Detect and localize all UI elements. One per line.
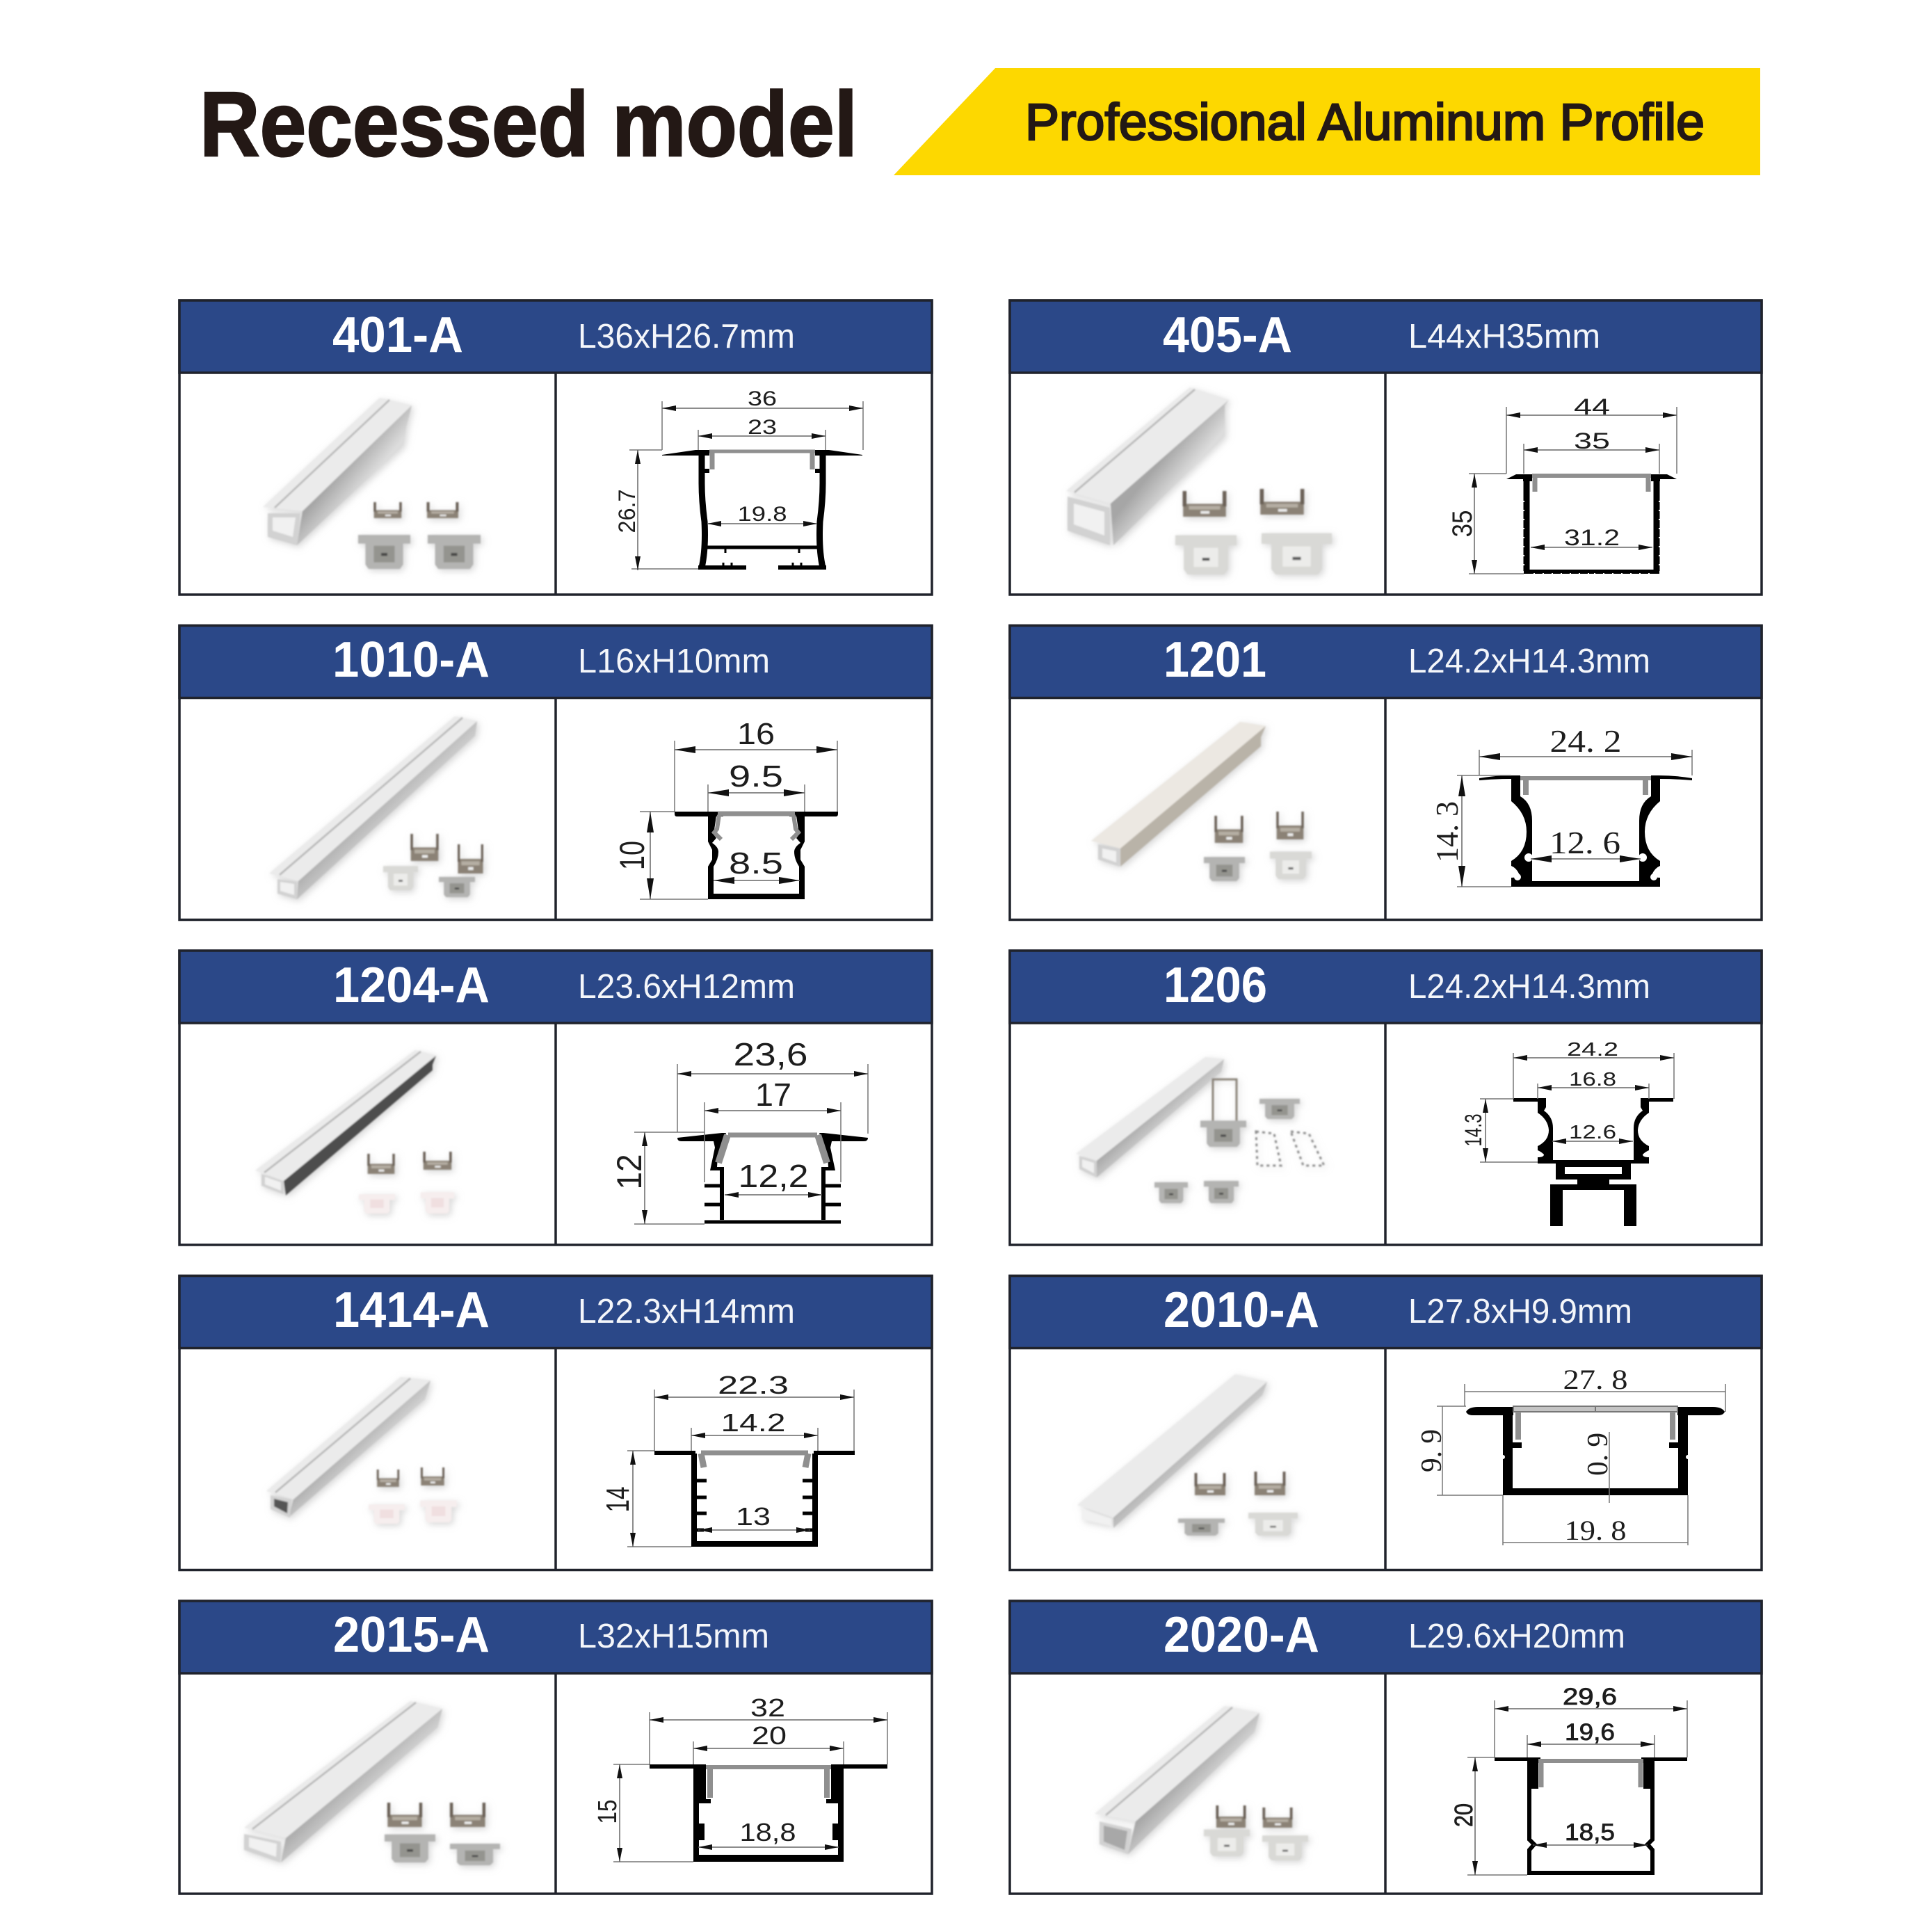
cross-section drawing: 17 [755, 1077, 791, 1113]
model name: 2010-A [1164, 1282, 1319, 1338]
model name: 1010-A [332, 632, 490, 688]
size spec: L44xH35mm [1408, 318, 1600, 355]
product photo: rail and clips [244, 1701, 500, 1865]
size spec: L24.2xH14.3mm [1408, 968, 1650, 1006]
cross-section drawing: 44 [1574, 394, 1610, 419]
product photo: rail and clips [1095, 1706, 1308, 1860]
cross-section drawing: 24. 2 [1549, 723, 1622, 759]
panel: 1010-A [179, 626, 932, 919]
product photo: rail and clips [269, 716, 483, 899]
cross-section drawing: 19,6 [1565, 1719, 1615, 1746]
cross-section drawing: 23,6 [733, 1036, 808, 1072]
cross-section drawing: 31.2 [1564, 525, 1620, 550]
size spec: L24.2xH14.3mm [1408, 643, 1650, 680]
cross-section drawing: 26.7 [614, 490, 641, 533]
cross-section drawing: 14 [599, 1487, 636, 1512]
cross-section drawing: 22.3 [718, 1371, 789, 1399]
cross-section drawing: 12.6 [1569, 1121, 1616, 1143]
cross-section drawing: 29,6 [1563, 1684, 1617, 1710]
cross-section drawing: 16.8 [1569, 1068, 1616, 1090]
cross-section drawing: 20 [1449, 1803, 1478, 1827]
cross-section drawing: 18,5 [1565, 1819, 1615, 1846]
cross-section drawing: 35 [1574, 428, 1610, 453]
size spec: L22.3xH14mm [578, 1293, 795, 1330]
cross-section drawing: 14.2 [721, 1408, 786, 1437]
cross-section drawing: 14. 3 [1429, 801, 1465, 862]
title: Recessed model [200, 73, 858, 175]
cross-section drawing: 24.2 [1567, 1038, 1618, 1060]
yellow banner: Professional Aluminum Profile [1025, 93, 1705, 151]
size spec: L16xH10mm [578, 643, 770, 680]
cross-section drawing: 0. 9 [1582, 1433, 1614, 1476]
cross-section drawing: 20 [752, 1721, 787, 1750]
model name: 1204-A [333, 958, 490, 1013]
product photo: rail and clips [1077, 1374, 1298, 1536]
cross-section drawing: 8.5 [729, 846, 783, 880]
size spec: L27.8xH9.9mm [1408, 1293, 1632, 1330]
cross-section drawing: 9. 9 [1416, 1429, 1448, 1472]
model name: 1201 [1164, 632, 1266, 688]
panel: 2010-A [1010, 1275, 1762, 1570]
cross-section drawing [599, 1371, 855, 1547]
panel: 401-A [179, 300, 932, 595]
cross-section drawing [1460, 1038, 1674, 1226]
panel: 405-A [1010, 300, 1762, 595]
size spec: L36xH26.7mm [578, 318, 795, 355]
model name: 401-A [332, 307, 463, 363]
cross-section drawing: 12 [610, 1154, 649, 1189]
cross-section drawing [1447, 394, 1677, 574]
model name: 405-A [1163, 307, 1292, 363]
product photo: rail and clips [266, 1377, 457, 1524]
product photo: rail and clips [1091, 722, 1312, 881]
cross-section drawing: 12. 6 [1549, 825, 1620, 860]
panel: 1204-A [179, 951, 932, 1245]
model name: 2015-A [333, 1607, 490, 1663]
cross-section drawing: 23 [748, 416, 777, 439]
panel: 2015-A [179, 1601, 932, 1894]
cross-section drawing [1449, 1684, 1687, 1875]
cross-section drawing: 35 [1447, 510, 1478, 537]
panel: 2020-A [1010, 1601, 1762, 1894]
product photo: rail and clips [255, 1050, 454, 1214]
panel: 1201 [1010, 626, 1762, 919]
cross-section drawing: 18,8 [740, 1818, 796, 1846]
cross-section drawing: 14.3 [1460, 1114, 1487, 1146]
cross-section drawing: 12,2 [739, 1158, 808, 1194]
size spec: L29.6xH20mm [1408, 1618, 1625, 1655]
product photo: rail and clips [1066, 387, 1332, 574]
size spec: L23.6xH12mm [578, 968, 795, 1006]
cross-section drawing: 19. 8 [1565, 1515, 1626, 1546]
cross-section drawing [1429, 723, 1692, 887]
cross-section drawing: 15 [593, 1800, 622, 1824]
cross-section drawing [614, 387, 863, 570]
cross-section drawing [610, 1036, 868, 1224]
cross-section drawing: 19.8 [737, 503, 787, 526]
panel: 1206 [1010, 951, 1762, 1245]
cross-section drawing [613, 717, 838, 899]
panel: 1414-A [179, 1275, 932, 1570]
cross-section drawing: 27. 8 [1563, 1364, 1627, 1395]
product photo: rail and clips [263, 398, 481, 569]
model name: 2020-A [1164, 1607, 1319, 1663]
cross-section drawing: 36 [748, 387, 777, 410]
cross-section drawing: 16 [737, 717, 775, 751]
model name: 1414-A [333, 1282, 490, 1338]
cross-section drawing: 13 [736, 1502, 771, 1531]
size spec: L32xH15mm [578, 1618, 769, 1655]
cross-section drawing: 10 [613, 841, 652, 870]
product photo: rail and clips [1076, 1057, 1324, 1203]
cross-section drawing: 9.5 [729, 759, 783, 794]
cross-section drawing: 32 [750, 1693, 785, 1722]
cross-section drawing [1416, 1364, 1725, 1546]
yellow banner [894, 68, 1760, 175]
model name: 1206 [1164, 958, 1267, 1013]
cross-section drawing [593, 1693, 887, 1862]
